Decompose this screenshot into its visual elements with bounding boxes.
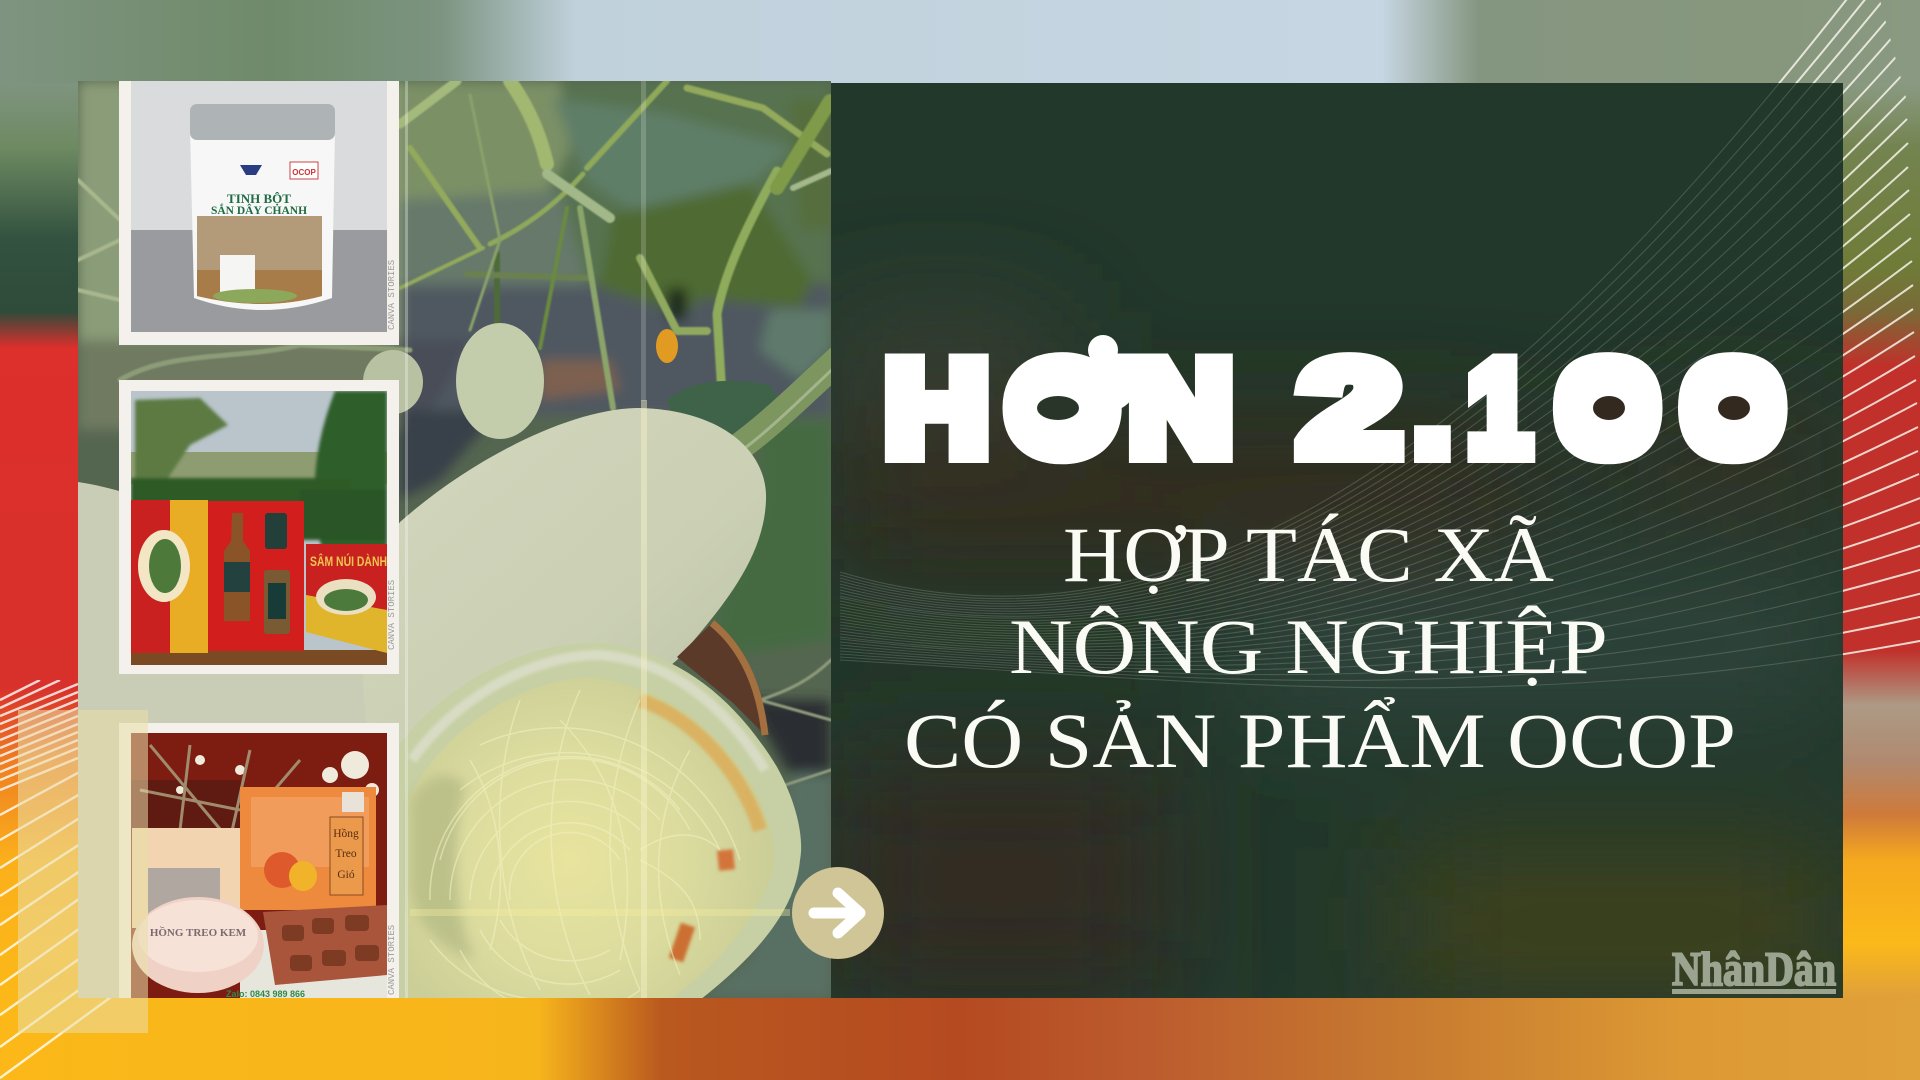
headline: HƠN (885, 335, 1233, 483)
box lid red and yellow (131, 500, 171, 653)
card 1 film labels: CANVA STORIES (387, 260, 397, 330)
cream box (132, 828, 240, 928)
panel: photo collage (78, 81, 840, 1015)
large bottle (224, 513, 250, 621)
pulp threads (430, 690, 740, 1015)
card 2: gift box (119, 380, 399, 674)
card 3 film labels: CANVA STORIES (387, 925, 397, 995)
decorative line fan outside panel (1778, 0, 1920, 656)
subtitle: NÔNG NGHIỆP (1009, 603, 1608, 690)
subtitle: CÓ SẢN PHẨM OCOP (904, 697, 1736, 784)
watermark: Nhan Dan: NhânDân (1672, 943, 1836, 996)
dark flesh hollow (410, 775, 475, 960)
gourd stalk (735, 358, 840, 450)
translucent cream rectangle (18, 710, 148, 1033)
card 3: persimmon products (119, 723, 399, 999)
jar logo (240, 165, 262, 175)
card 3: persimmon products: Hồng (333, 827, 359, 840)
headline: . (1414, 335, 1451, 483)
subtitle: HỢP TÁC XÃ (1063, 511, 1554, 598)
bottom paper (240, 930, 387, 998)
left gourd (78, 482, 367, 998)
card 1: jar (119, 81, 399, 345)
small gourd (456, 323, 544, 439)
dried persimmon pack (263, 905, 387, 985)
small gourd behind (363, 350, 423, 414)
hedge and trees (131, 391, 387, 560)
cut gourd flesh (408, 677, 774, 1000)
tub text: HỒNG TREO KEM (150, 926, 247, 939)
basket (677, 623, 765, 735)
headline: 2 (1300, 334, 1400, 483)
headline: 1 (1468, 334, 1531, 483)
headline (885, 334, 1783, 483)
jar product name: SẮN DÂY CHANH (211, 202, 307, 217)
jar body (190, 130, 335, 310)
small jar (265, 513, 287, 549)
subtitle (904, 511, 1736, 784)
jar photo label (197, 216, 322, 304)
side box title: SÂM NÚI DÀNH (310, 552, 387, 569)
card 3: persimmon products: Treo (335, 848, 357, 860)
card 2 film labels: CANVA STORIES (387, 580, 397, 650)
letter counter shaping (1028, 372, 1758, 444)
blossoms (176, 751, 379, 797)
hong treo gio label (330, 817, 363, 895)
cut gourd outer (399, 643, 801, 1000)
decorative stripes bottom left (0, 680, 112, 1079)
orange box (240, 787, 376, 910)
headline: 00 (1558, 334, 1783, 483)
jar lid (190, 104, 335, 140)
open box (208, 501, 304, 651)
phone line: Zalo: 0843 989 866 (226, 989, 305, 999)
cut gourd pale rim (412, 655, 765, 770)
large gourd (399, 408, 766, 721)
side box (306, 595, 387, 653)
vine stems (78, 81, 831, 790)
arrow button (792, 867, 884, 959)
round tub (132, 897, 264, 993)
jar product name: TINH BỘT (227, 191, 291, 206)
light leak streaks (405, 81, 790, 998)
flower (656, 329, 678, 363)
jar ocop text: OCOP (292, 168, 316, 177)
card 3: persimmon products: Gió (337, 869, 355, 881)
foliage background (78, 81, 831, 998)
lower right leaf (667, 381, 777, 434)
orange pulp (640, 700, 760, 960)
panel: dark text panel (831, 0, 1920, 998)
second jar (264, 570, 290, 634)
